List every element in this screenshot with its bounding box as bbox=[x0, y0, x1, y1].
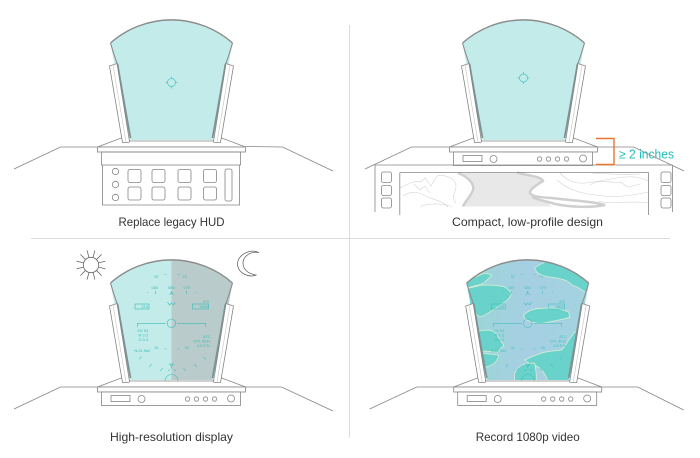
HUD frame and base bbox=[98, 260, 246, 392]
caption: Compact, low-profile design bbox=[452, 215, 603, 229]
dashboard outline bbox=[14, 146, 333, 171]
crosshair symbol bbox=[518, 72, 530, 84]
panel: record 1080p video bbox=[370, 255, 684, 444]
panel: high-resolution display bbox=[14, 255, 333, 444]
split day and night glass bbox=[111, 260, 232, 380]
video map on glass bbox=[467, 260, 588, 380]
right buttons bbox=[661, 172, 671, 208]
panel: replace legacy HUD bbox=[14, 20, 333, 229]
caption: Replace legacy HUD bbox=[118, 215, 225, 229]
panel: compact low-profile design bbox=[365, 20, 684, 229]
HUD symbology bbox=[491, 274, 568, 381]
electronics unit bbox=[102, 392, 240, 406]
HUD frame and base bbox=[454, 260, 602, 392]
left buttons bbox=[382, 172, 392, 208]
dashboard outline bbox=[365, 147, 684, 171]
HUD symbology bbox=[134, 274, 211, 381]
caption: High-resolution display bbox=[110, 430, 233, 444]
crosshair symbol bbox=[166, 76, 178, 88]
HUD frame and base bbox=[98, 20, 246, 152]
electronics unit bbox=[458, 392, 597, 406]
HUD glass bbox=[110, 20, 232, 140]
caption: Record 1080p video bbox=[476, 430, 580, 444]
icon: moon bbox=[237, 251, 259, 276]
lower display with map bbox=[375, 165, 672, 215]
dashboard outline bbox=[14, 387, 333, 411]
icon: sun bbox=[76, 250, 106, 280]
HUD glass bbox=[462, 20, 584, 140]
dashboard outline bbox=[370, 387, 684, 410]
terrain map bbox=[400, 172, 648, 215]
height bracket bbox=[596, 138, 614, 164]
legacy control panel bbox=[102, 152, 240, 205]
HUD frame and base bbox=[450, 20, 598, 152]
height label: ≥ 2 inches bbox=[619, 148, 674, 162]
electronics unit bbox=[454, 152, 592, 166]
